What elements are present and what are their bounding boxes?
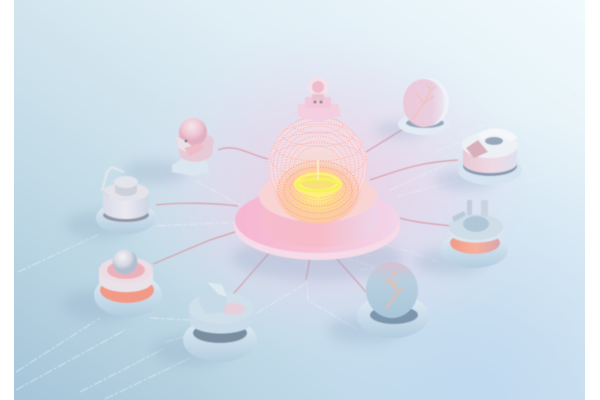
node: top lamp [298, 77, 341, 122]
node shadows [62, 122, 495, 366]
node: sphere bottom left [94, 250, 162, 317]
glowing core [294, 172, 342, 196]
node: rock bottom centre [183, 282, 257, 362]
node: plug right [440, 200, 508, 268]
node: gear right [458, 128, 522, 185]
hub drum [284, 219, 337, 247]
node: robot arm left [96, 167, 156, 234]
node: stone bottom right [357, 262, 429, 338]
node: robot head upper left [172, 118, 214, 176]
pink wires [153, 128, 458, 300]
hub pink glow [176, 81, 456, 316]
glowing wire dome [268, 117, 368, 224]
hub plate [234, 221, 400, 260]
node: leaf disk top right [398, 78, 450, 135]
pale circuit traces [16, 176, 420, 400]
central hub [234, 117, 400, 260]
